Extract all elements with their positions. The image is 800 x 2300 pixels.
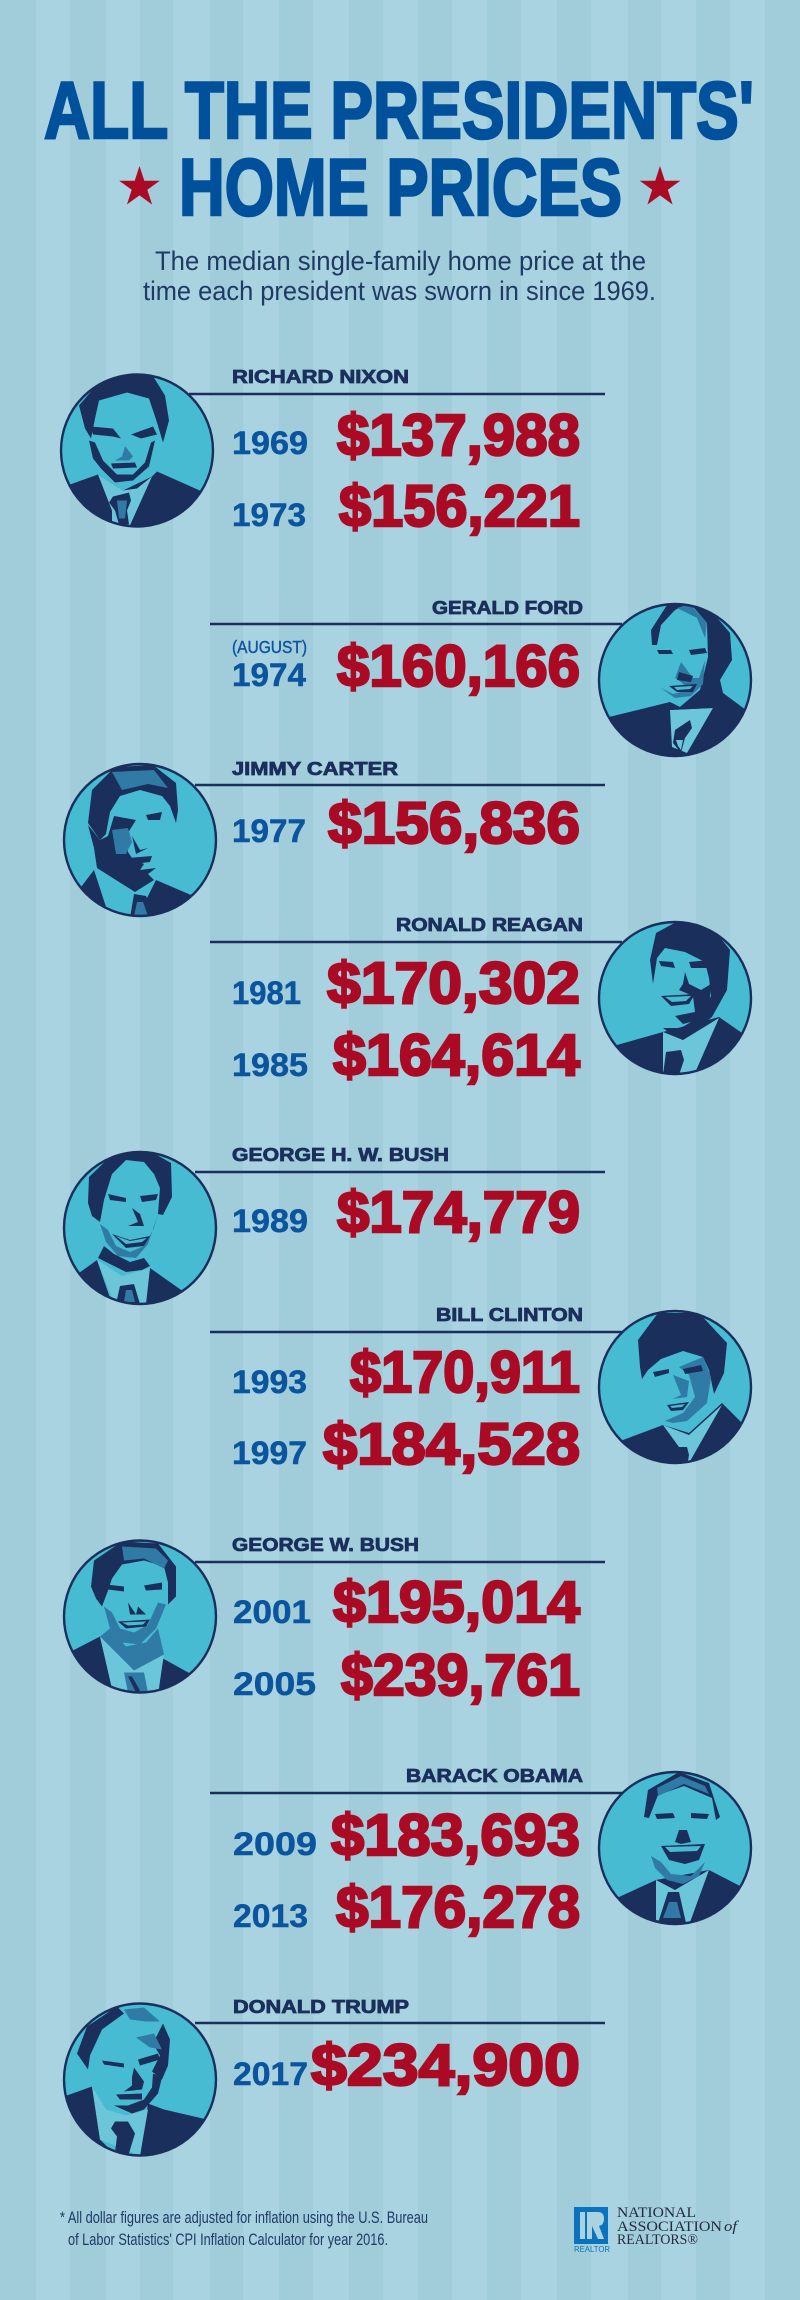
- year: 1969: [232, 425, 308, 461]
- year: 1973: [232, 497, 306, 533]
- portrait: George H. W. Bush: [60, 1150, 216, 1308]
- portrait: George W. Bush: [60, 1540, 216, 1696]
- panel: Bill Clinton: [210, 1304, 755, 1477]
- president name: BILL CLINTON: [436, 1304, 583, 1325]
- price: $170,911: [350, 1340, 580, 1405]
- year: 1985: [232, 1047, 308, 1083]
- subtitle: time each president was sworn in since 1969.: [143, 276, 656, 306]
- price: $164,614: [333, 1023, 580, 1088]
- icon: right star: [640, 166, 680, 204]
- president name: BARACK OBAMA: [406, 1765, 583, 1786]
- panel: George W. Bush: [60, 1534, 605, 1708]
- year: 2005: [233, 1666, 316, 1702]
- logo: National Association of Realtors: ASSOCIATION: [617, 2219, 722, 2235]
- price: $137,988: [337, 403, 580, 468]
- year: 1974: [232, 657, 306, 693]
- price: $156,221: [339, 474, 580, 539]
- year: 1997: [232, 1435, 307, 1471]
- president name: GEORGE W. BUSH: [232, 1534, 419, 1555]
- price: $176,278: [336, 1875, 580, 1940]
- title: HOME PRICES: [179, 143, 622, 233]
- president name: RONALD REAGAN: [396, 914, 583, 935]
- panel: Barack Obama: [210, 1765, 755, 1940]
- price: $156,836: [328, 791, 580, 856]
- year: 1981: [232, 975, 301, 1011]
- price: $170,302: [327, 951, 580, 1016]
- president name: RICHARD NIXON: [232, 366, 409, 387]
- year: 1993: [232, 1364, 307, 1400]
- year: 1989: [232, 1203, 308, 1239]
- price: $183,693: [331, 1803, 580, 1868]
- footnote: of Labor Statistics' CPI Inflation Calculator for year 2016.: [68, 2230, 388, 2249]
- year: 1977: [232, 813, 306, 849]
- price: $234,900: [311, 2033, 580, 2098]
- footnote: [60, 2208, 428, 2249]
- year: 2017: [233, 2056, 308, 2092]
- logo: National Association of Realtors: NATIONAL: [617, 2205, 696, 2221]
- panel: Gerald Ford: [210, 597, 755, 760]
- logo: National Association of Realtors: of: [724, 2219, 739, 2235]
- year: 2009: [233, 1826, 317, 1862]
- subtitle: The median single-family home price at the: [155, 246, 646, 276]
- president name: DONALD TRUMP: [233, 1996, 409, 2017]
- portrait: Nixon: [57, 372, 217, 530]
- subtitle: [143, 246, 656, 306]
- panel: George H. W. Bush: [60, 1144, 605, 1308]
- panel: Jimmy Carter: [60, 758, 605, 920]
- year: 2001: [233, 1594, 311, 1630]
- portrait: Obama: [595, 1772, 755, 1928]
- price: $239,761: [341, 1643, 580, 1708]
- panel: Richard Nixon: [57, 366, 605, 539]
- logo: National Association of Realtors: [574, 2205, 739, 2254]
- footnote: * All dollar figures are adjusted for inflation using the U.S. Bureau: [60, 2208, 428, 2227]
- portrait: Ford: [595, 603, 755, 760]
- portrait: Reagan: [595, 921, 755, 1078]
- price: $160,166: [337, 634, 580, 699]
- title: [44, 66, 754, 233]
- year note: (AUGUST): [232, 637, 307, 657]
- panel: Ronald Reagan: [210, 914, 755, 1088]
- price: $184,528: [323, 1412, 580, 1477]
- president name: JIMMY CARTER: [232, 758, 398, 779]
- president name: GERALD FORD: [432, 597, 583, 618]
- panel: Donald Trump: [60, 1996, 605, 2160]
- icon: left star: [119, 166, 160, 204]
- year: 2013: [233, 1898, 308, 1934]
- logo: National Association of Realtors: REALTORS®: [617, 2232, 698, 2248]
- portrait: Clinton: [595, 1311, 755, 1467]
- logo: National Association of Realtors: REALTOR: [574, 2244, 610, 2254]
- portrait: Carter: [60, 764, 216, 920]
- price: $195,014: [333, 1570, 580, 1635]
- portrait: Trump: [60, 2004, 216, 2160]
- price: $174,779: [337, 1180, 580, 1245]
- president name: GEORGE H. W. BUSH: [232, 1144, 449, 1165]
- icon: realtor R block: [574, 2207, 608, 2244]
